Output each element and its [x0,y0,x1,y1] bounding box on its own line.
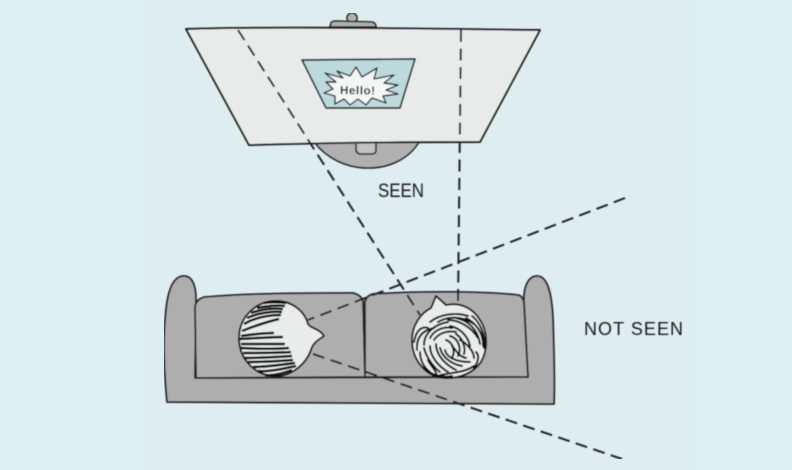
left person head [239,301,324,376]
on-screen picture [302,59,415,108]
right person head [412,296,486,378]
icon: starburst speech [324,67,398,105]
dashed sight lines [238,30,625,459]
right seat cushion [365,292,528,377]
sofa [164,276,554,404]
label: seen: SEEN [378,181,424,202]
left person hair [240,302,296,375]
right person curly hair [414,314,484,377]
icon: television back knob [330,13,376,27]
drawing [164,13,683,459]
left seat cushion [195,293,365,378]
icon: television stand base [315,142,419,168]
label: not seen: NOT SEEN [584,319,683,339]
starburst text: Hello! [340,85,376,98]
television screen [186,28,540,145]
